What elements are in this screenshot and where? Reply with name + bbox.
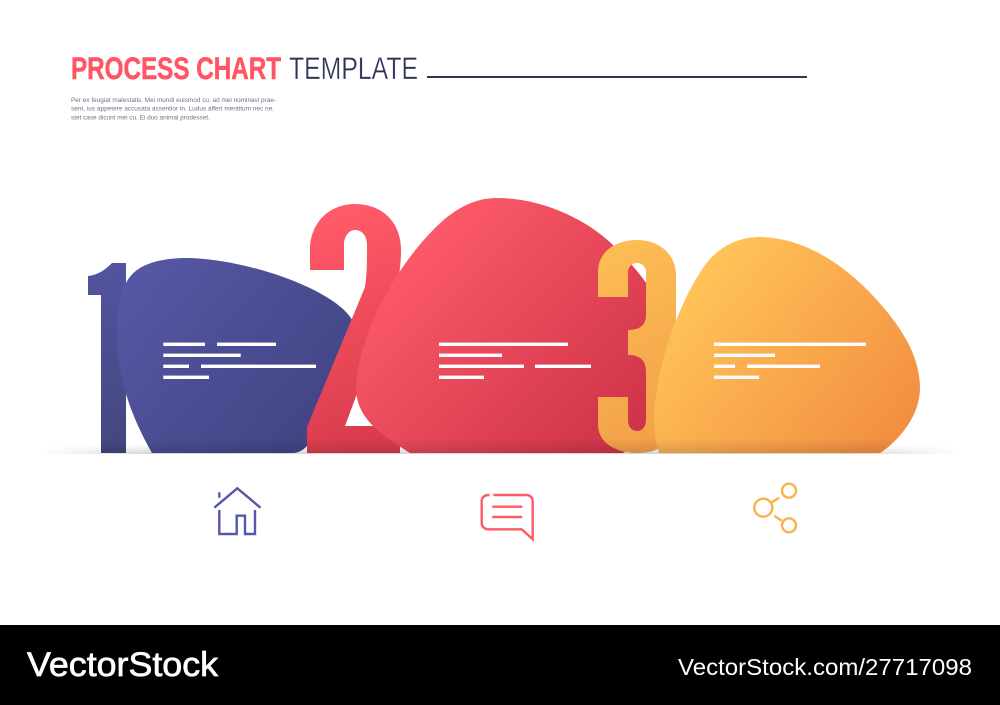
title: TEMPLATE	[289, 50, 418, 86]
floor shading on shapes	[101, 442, 892, 453]
ground shadow	[40, 445, 960, 454]
intro text block: sent, ius appetere accusata assentior in. Ludus affert mentitum nec ne,	[71, 106, 274, 113]
footer bar	[0, 625, 1000, 705]
blob 3	[654, 237, 920, 453]
footer url: VectorStock.com/27717098	[678, 654, 972, 680]
step 1: number and blob	[88, 258, 353, 453]
blob 2	[356, 198, 680, 453]
icon: house	[214, 488, 260, 534]
number 1	[88, 263, 126, 453]
icon: speech bubble	[482, 495, 533, 539]
text lines: step 1	[163, 343, 316, 379]
icon: share nodes	[754, 484, 796, 532]
step 3: number and blob	[598, 237, 920, 453]
title: PROCESS CHART	[71, 50, 281, 86]
step 2: number and blob	[307, 198, 680, 453]
intro text block: Per ex feugiat malestatis. Mei mundi euismod cu, ad mei nominavi prae-	[71, 97, 276, 104]
blob 1	[117, 258, 353, 453]
number 2	[307, 204, 401, 453]
title rule	[427, 76, 807, 78]
text lines: step 3	[714, 343, 866, 379]
number 3	[598, 240, 676, 453]
intro text block: stet case dicunt mei cu. Ei duo animal prodesset.	[71, 115, 210, 122]
text lines: step 2	[439, 343, 591, 379]
footer logo: VectorStock	[27, 646, 219, 684]
intro text block	[71, 97, 276, 122]
